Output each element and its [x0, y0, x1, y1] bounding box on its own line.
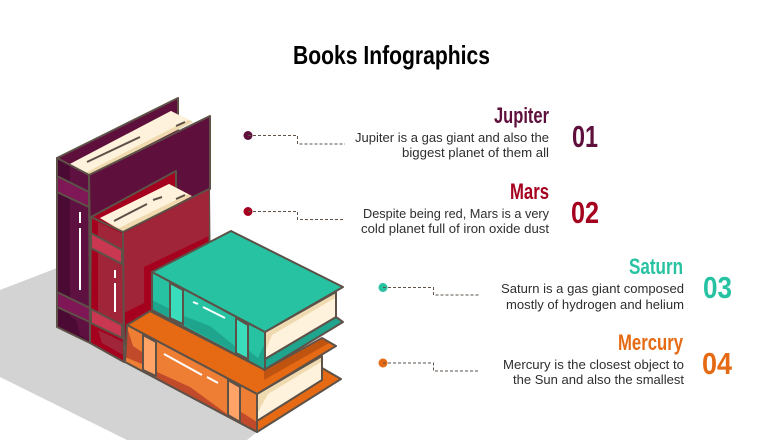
connector: Saturn [378, 283, 479, 295]
text block: Mars [361, 179, 549, 236]
book: orange [125, 311, 341, 432]
number: 04: 04 [702, 346, 733, 381]
text block: Saturn: Saturn [629, 254, 683, 279]
text block: Mars: Mars [510, 179, 549, 204]
text block: Saturn: mostly of hydrogen and helium [506, 297, 684, 312]
floor shadow [0, 268, 257, 440]
text block: Jupiter: Jupiter is a gas giant and also the [355, 130, 549, 145]
text block: Mercury: Mercury is the closest object to [503, 357, 684, 372]
number: 02: 02 [571, 195, 599, 230]
number: 03: 03 [703, 270, 732, 305]
text block: Jupiter: Jupiter [494, 103, 549, 128]
text block: Mercury: the Sun and also the smallest [513, 372, 684, 387]
book: teal [152, 231, 343, 370]
connector: Mercury [378, 358, 479, 371]
title: Books Infographics [293, 40, 490, 70]
number: 01: 01 [572, 119, 598, 154]
text block: Saturn [501, 254, 684, 312]
illustration: stack of books [57, 98, 343, 432]
text block: Jupiter [355, 103, 549, 160]
book: red [90, 171, 210, 362]
connector: Mars [244, 207, 345, 220]
text block: Mercury: Mercury [618, 330, 684, 355]
text block: Mercury [503, 330, 684, 387]
text block: Mars: Despite being red, Mars is a very [363, 206, 549, 221]
book: purple [57, 98, 210, 343]
text block: Jupiter: biggest planet of them all [402, 145, 549, 160]
text block: Mars: cold planet full of iron oxide dust [361, 221, 549, 236]
text block: Saturn: Saturn is a gas giant composed [501, 281, 684, 296]
connector: Jupiter [244, 131, 345, 144]
